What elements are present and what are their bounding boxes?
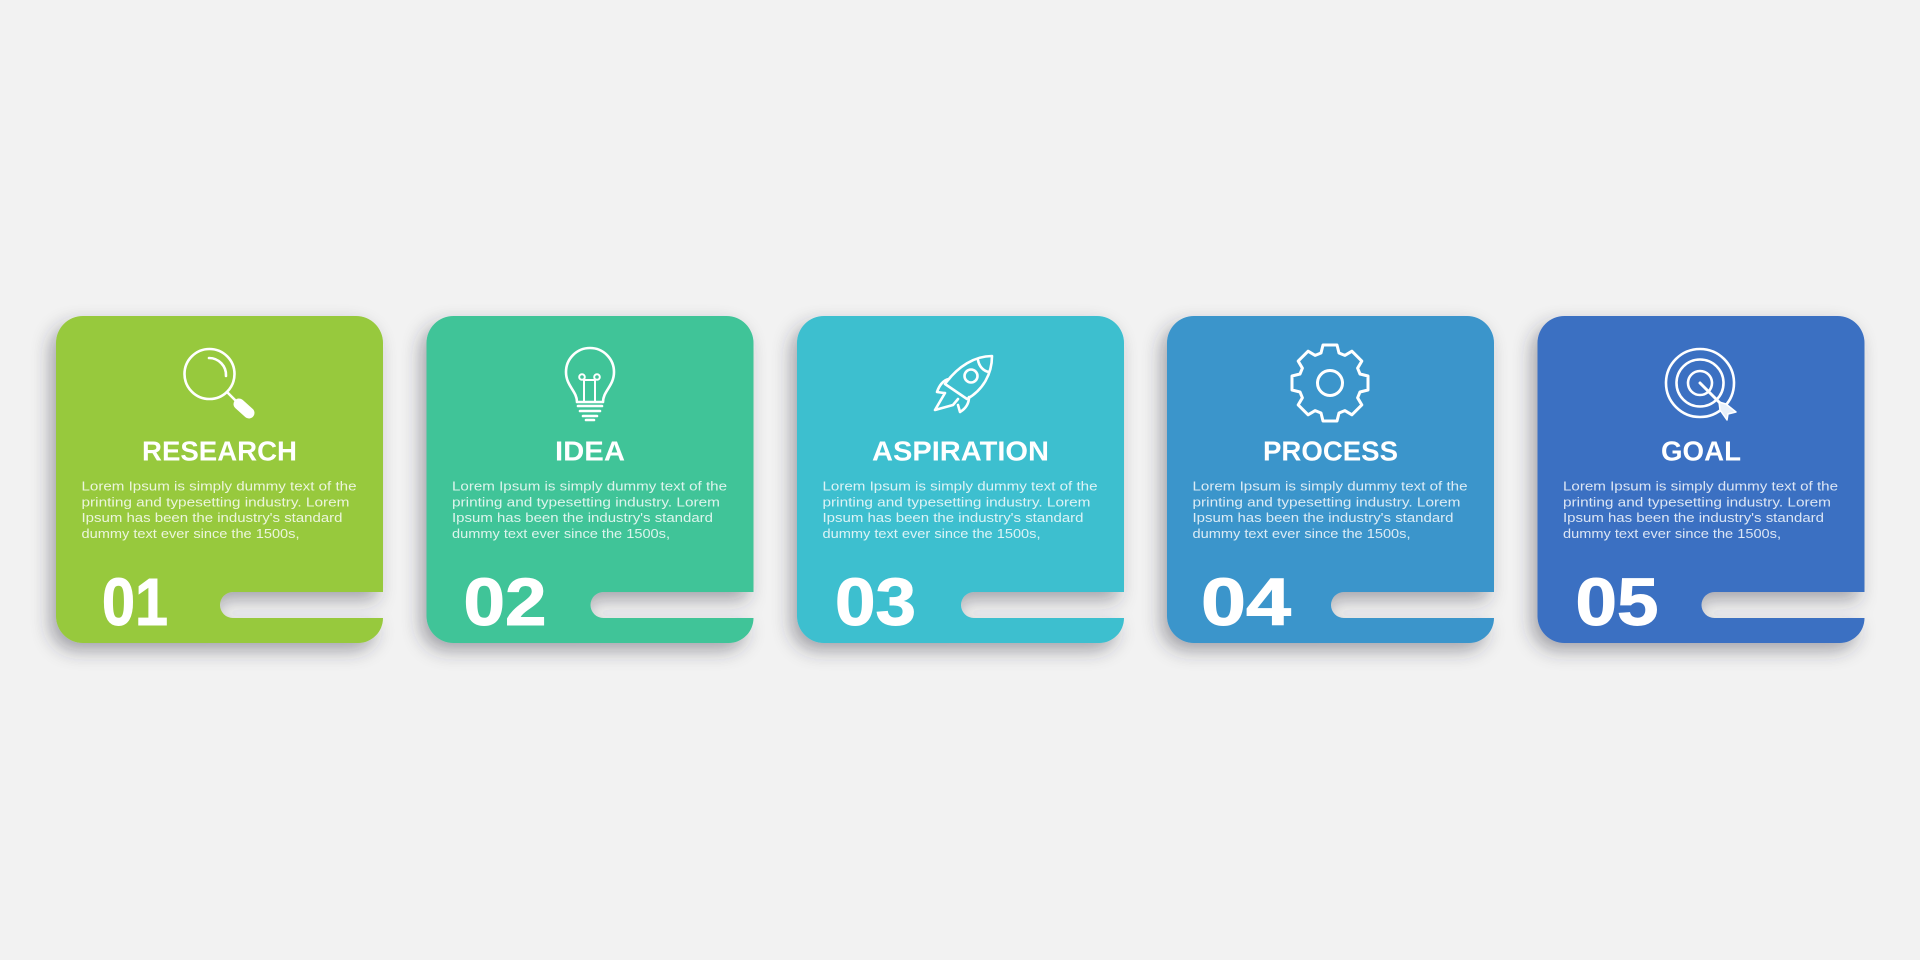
number: 04 (1201, 565, 1291, 640)
icon: magnifying glass (184, 349, 249, 413)
description: printing and typesetting industry. Lorem (452, 494, 720, 510)
panel: idea (426, 316, 754, 643)
panel: goal (1538, 316, 1864, 643)
description: Lorem Ipsum is simply dummy text of the (822, 478, 1098, 494)
number: 05 (1576, 565, 1658, 640)
heading: PROCESS (1263, 436, 1398, 466)
description: dummy text ever since the 1500s, (1563, 526, 1781, 541)
description (452, 478, 727, 541)
card shape (56, 316, 383, 643)
description (1192, 478, 1468, 541)
description: printing and typesetting industry. Lorem (822, 494, 1090, 510)
icon: target with arrow (1666, 349, 1736, 420)
description: dummy text ever since the 1500s, (822, 526, 1040, 541)
description: Lorem Ipsum is simply dummy text of the (1192, 478, 1468, 494)
number: 02 (464, 565, 546, 640)
number: 03 (835, 565, 916, 640)
description (1563, 478, 1838, 541)
panel: process (1167, 316, 1494, 643)
description: printing and typesetting industry. Lorem (82, 494, 350, 510)
description: printing and typesetting industry. Lorem (1192, 494, 1460, 510)
description (82, 478, 356, 541)
description: Ipsum has been the industry's standard (1192, 510, 1454, 525)
icon: gear (1292, 345, 1368, 421)
description: Ipsum has been the industry's standard (452, 510, 713, 525)
description (822, 478, 1098, 541)
description: Ipsum has been the industry's standard (1563, 510, 1824, 525)
description: printing and typesetting industry. Lorem (1563, 494, 1831, 510)
number: 01 (102, 565, 168, 640)
heading: ASPIRATION (872, 436, 1049, 466)
description: Lorem Ipsum is simply dummy text of the (452, 478, 727, 494)
description: Lorem Ipsum is simply dummy text of the (82, 478, 356, 494)
panel: research (56, 316, 383, 643)
description: Lorem Ipsum is simply dummy text of the (1563, 478, 1838, 494)
icon: light bulb (566, 348, 614, 420)
description: Ipsum has been the industry's standard (822, 510, 1084, 525)
heading: IDEA (555, 436, 625, 466)
icon: rocket (935, 356, 992, 412)
description: Ipsum has been the industry's standard (82, 510, 342, 525)
card shape (1538, 316, 1864, 643)
heading: RESEARCH (142, 436, 297, 466)
heading: GOAL (1661, 436, 1741, 466)
description: dummy text ever since the 1500s, (82, 526, 300, 541)
panel: aspiration (797, 316, 1124, 643)
card shape (426, 316, 754, 643)
description: dummy text ever since the 1500s, (452, 526, 670, 541)
card shape (797, 316, 1124, 643)
description: dummy text ever since the 1500s, (1192, 526, 1410, 541)
card shape (1167, 316, 1494, 643)
